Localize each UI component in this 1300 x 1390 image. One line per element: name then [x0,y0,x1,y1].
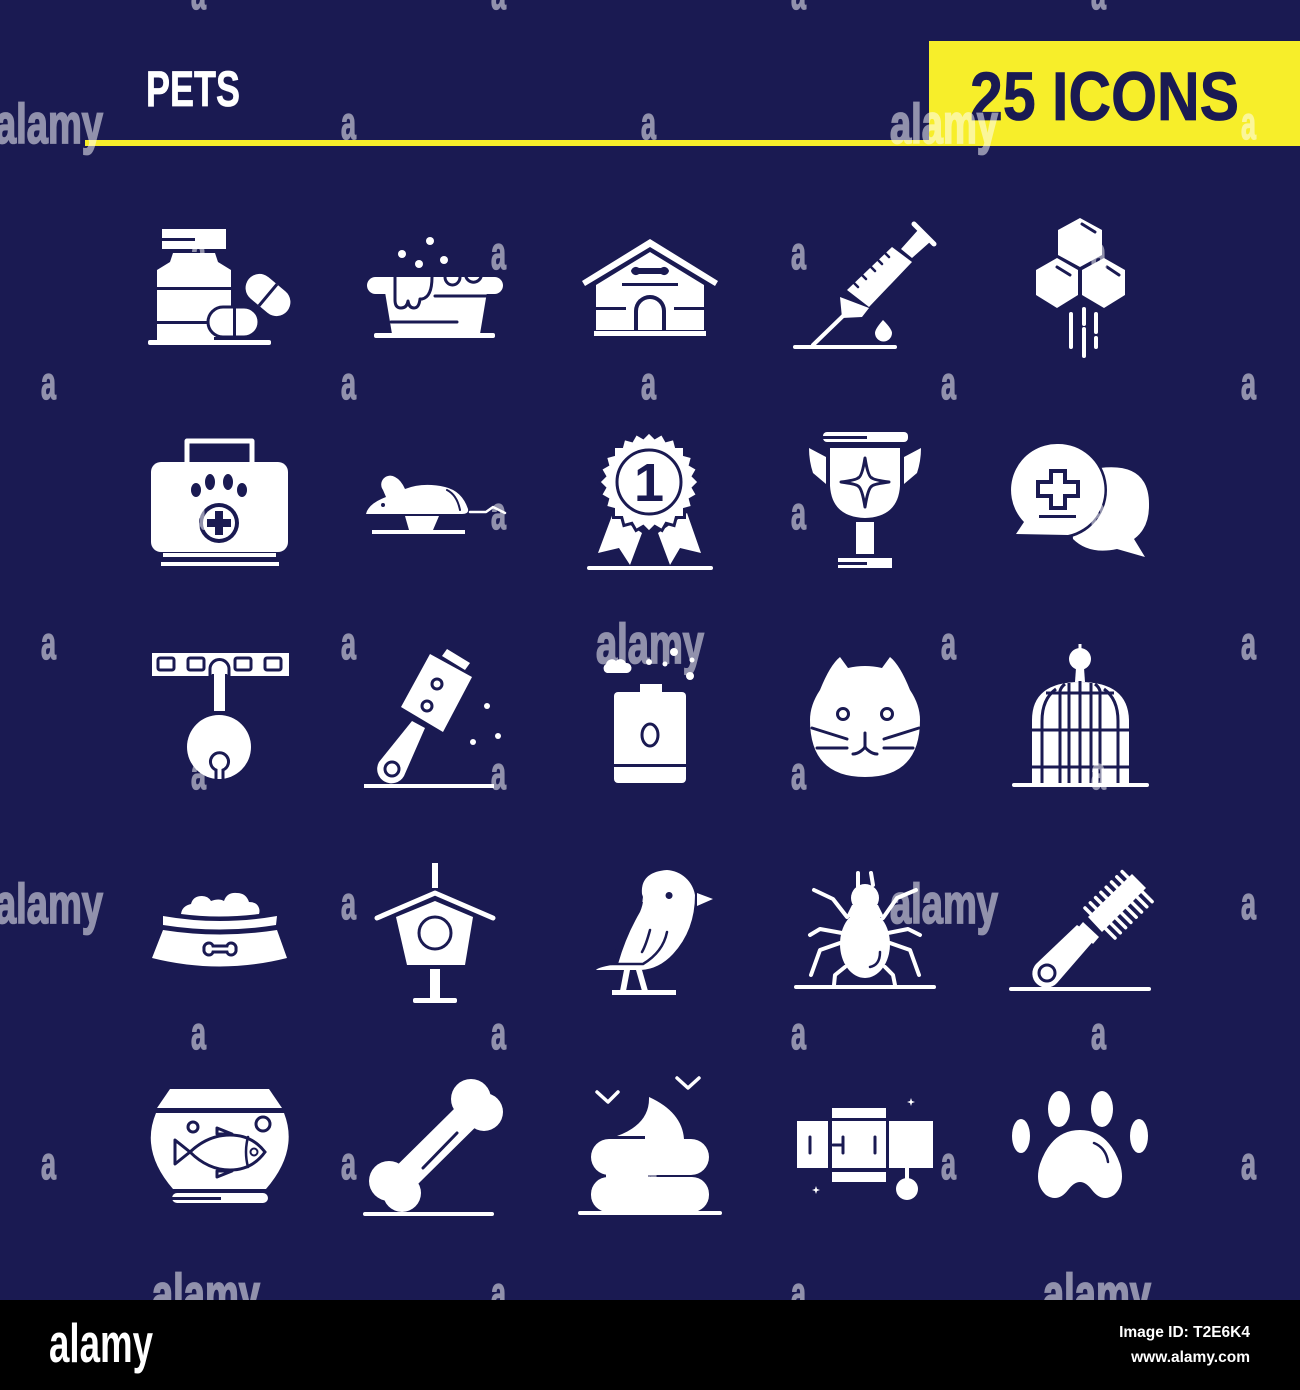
watermarks: a [41,1137,56,1189]
watermarks: alamy [596,612,704,675]
icon: pet waste [578,1078,722,1215]
badge: 25 icons [929,41,1300,146]
watermarks: alamy [890,92,998,155]
watermarks: a [491,747,506,799]
icon: medicine bottle and pills [148,229,296,345]
icon: dog house [582,239,718,336]
watermarks: a [41,617,56,669]
watermarks: a [341,617,356,669]
watermarks: a [791,487,806,539]
icon: bone [363,1079,503,1216]
watermarks: a [1091,1007,1106,1059]
icon: dog collar belt [797,1098,933,1200]
icon: food bowl [152,893,287,966]
watermarks: a [41,357,56,409]
watermarks: a [791,1007,806,1059]
icon: bird cage [1012,644,1149,787]
icon: cat face [810,657,920,777]
watermarks: a [191,487,206,539]
watermarks: a [491,1267,506,1319]
watermarks: alamy [890,872,998,935]
watermarks: a [341,877,356,929]
icon: pet bath tub [367,237,503,338]
watermarks: alamy [152,1262,260,1325]
footer bar [0,1300,1300,1390]
watermarks: a [941,1137,956,1189]
watermarks: a [191,747,206,799]
watermarks: a [491,227,506,279]
watermarks: a [1091,747,1106,799]
watermarks: a [1241,97,1256,149]
icon: shampoo bottle with bubbles [604,648,694,783]
icon: mouse [366,476,505,534]
watermarks: a [791,747,806,799]
watermarks: alamy [1043,1262,1151,1325]
icon: hair brush [1009,872,1152,991]
icon: bird house [377,863,493,1003]
watermarks: a [1091,487,1106,539]
watermarks: a [641,97,656,149]
footer url: www.alamy.com [1130,1349,1250,1366]
icon: vet case with paw [151,441,288,566]
icon: first place rosette: 1 [634,453,664,513]
watermarks: a [1241,617,1256,669]
watermarks: a [941,617,956,669]
watermarks: a [641,1137,656,1189]
icon: tick bug [794,873,936,989]
watermarks: a [1241,357,1256,409]
watermarks: a [491,487,506,539]
watermarks: a [341,357,356,409]
footer image id: Image ID: T2E6K4 [1119,1324,1250,1341]
icon: collar with bell [152,653,289,779]
watermarks: a [641,357,656,409]
icon: lint roller [364,649,501,788]
watermarks: a [791,227,806,279]
watermarks: a [1091,227,1106,279]
icon: honeycomb [1036,218,1125,356]
icon: bird [596,870,713,995]
watermarks: a [1241,1137,1256,1189]
icon: trophy [809,432,921,568]
header rule [85,140,945,146]
watermarks: a [791,1267,806,1319]
watermarks: a [941,357,956,409]
footer logo: alamy [49,1312,153,1374]
watermarks: a [191,227,206,279]
watermarks: a [191,1007,206,1059]
watermarks: a [641,877,656,929]
icon: fish bowl [151,1089,289,1203]
badge: 25 icons: 25 ICONS [970,58,1239,135]
watermarks: a [341,97,356,149]
watermarks: a [491,1007,506,1059]
icon: speech bubbles with cross [1009,441,1149,557]
icon: first place rosette [587,434,713,570]
icon: paw print [1012,1091,1148,1198]
title: PETS [146,61,240,117]
watermarks: a [341,1137,356,1189]
watermarks: a [1241,877,1256,929]
icon: syringe [793,224,934,349]
